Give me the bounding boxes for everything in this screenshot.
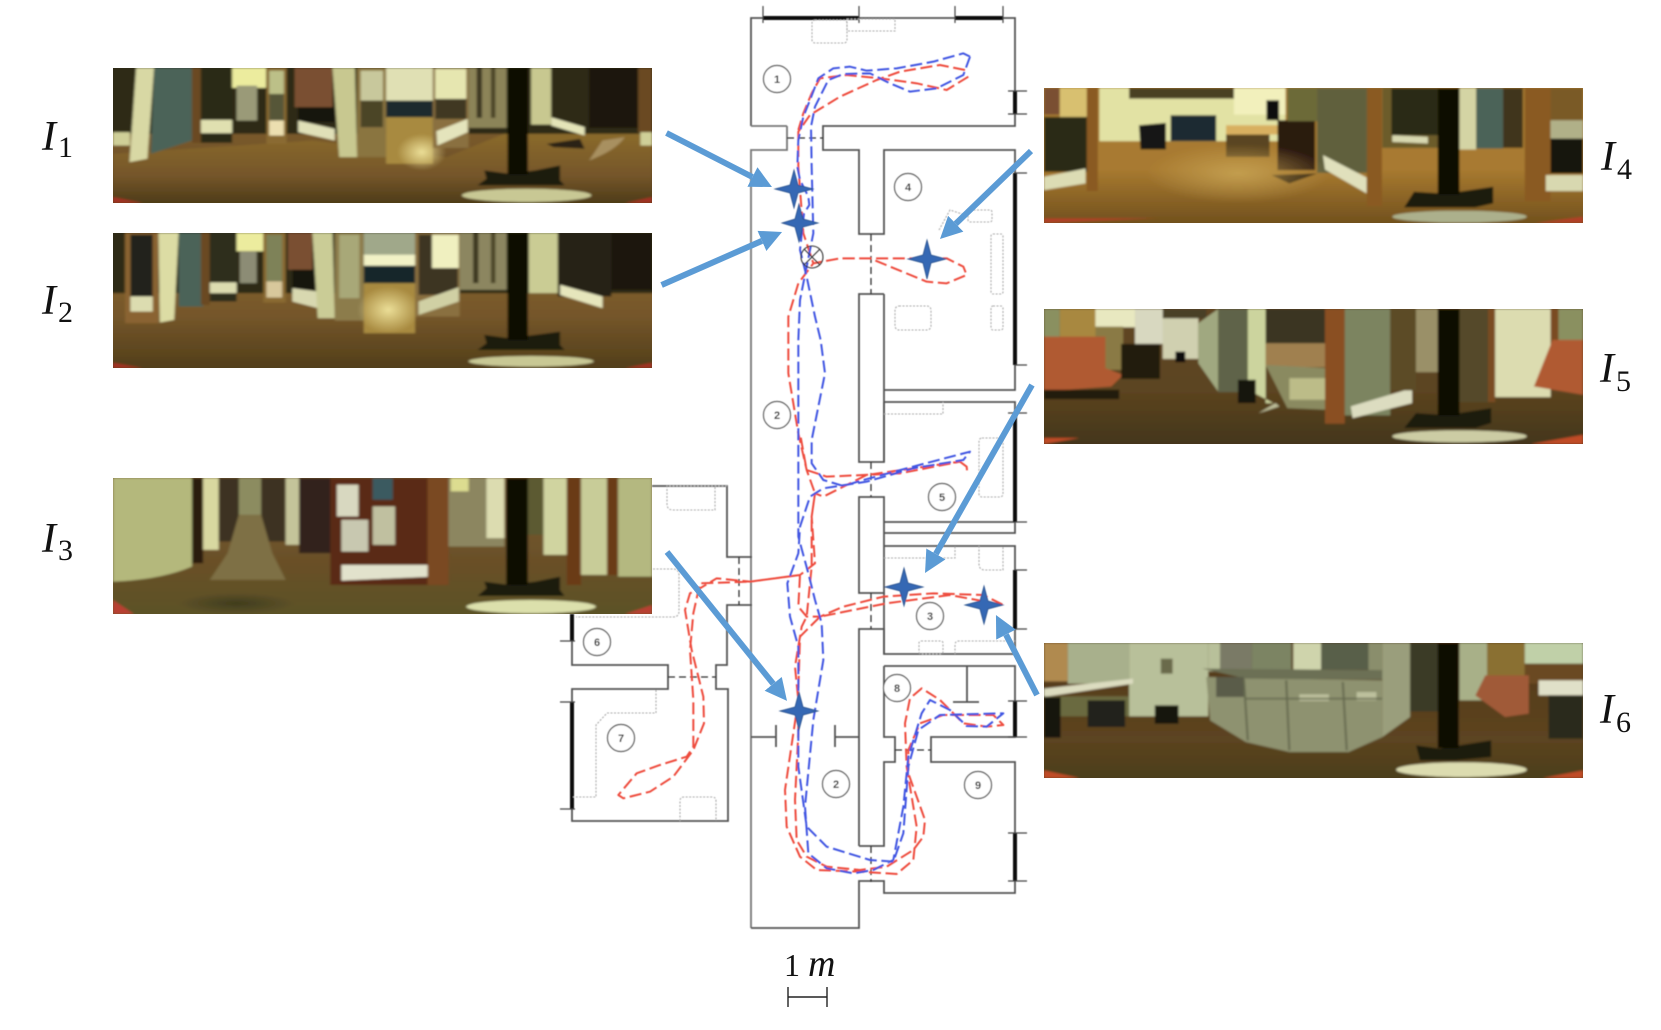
scale bar bbox=[788, 987, 827, 1007]
room number markers: 4 bbox=[905, 182, 912, 194]
label I6: 6 bbox=[1616, 706, 1631, 739]
panorama I1 bbox=[113, 68, 652, 203]
label I6: I bbox=[1600, 687, 1614, 733]
red trajectory bbox=[618, 65, 1003, 874]
room number markers: 9 bbox=[975, 780, 981, 792]
room number markers bbox=[584, 66, 992, 798]
panorama I6 bbox=[1044, 643, 1583, 778]
panorama I3 bbox=[113, 478, 652, 614]
label I2: 2 bbox=[58, 296, 73, 329]
room number markers: 5 bbox=[939, 492, 945, 504]
doors bbox=[668, 138, 931, 882]
windows bbox=[572, 18, 1015, 881]
room number markers: 1 bbox=[774, 74, 780, 86]
trajectories bbox=[618, 53, 1003, 874]
label I3: 3 bbox=[58, 534, 73, 567]
label I3: I bbox=[42, 516, 56, 562]
scale label: 1 m bbox=[784, 943, 835, 985]
floor plan bbox=[560, 6, 1027, 928]
label I4: I bbox=[1601, 134, 1615, 180]
label I2: I bbox=[42, 278, 56, 324]
panorama I2 bbox=[113, 233, 652, 368]
room number markers: 7 bbox=[618, 733, 624, 745]
room number markers: 3 bbox=[927, 611, 933, 623]
arrow to I1 location bbox=[666, 133, 752, 177]
label I5: 5 bbox=[1616, 365, 1631, 398]
arrow to I3 location bbox=[667, 552, 773, 684]
walls bbox=[572, 18, 1015, 928]
room number markers: 2 bbox=[833, 779, 839, 791]
start marker bbox=[801, 246, 823, 268]
label I5: I bbox=[1600, 346, 1614, 392]
room number markers: 6 bbox=[594, 637, 600, 649]
furniture outlines bbox=[573, 19, 1015, 821]
label I1: I bbox=[42, 114, 56, 160]
arrow to I2 location bbox=[662, 241, 762, 285]
arrow to I6 location bbox=[1006, 635, 1037, 695]
location stars bbox=[775, 170, 1003, 730]
label I1: 1 bbox=[58, 131, 73, 164]
blue trajectory bbox=[787, 53, 1003, 873]
room number markers: 2 bbox=[774, 410, 780, 422]
label I4: 4 bbox=[1617, 153, 1632, 186]
window ticks bbox=[560, 6, 1027, 881]
arrow to I4 location bbox=[956, 151, 1031, 224]
arrow to I5 location bbox=[936, 385, 1032, 554]
panorama I5 bbox=[1044, 309, 1583, 444]
panorama I4 bbox=[1044, 88, 1583, 223]
room number markers: 8 bbox=[894, 683, 900, 695]
